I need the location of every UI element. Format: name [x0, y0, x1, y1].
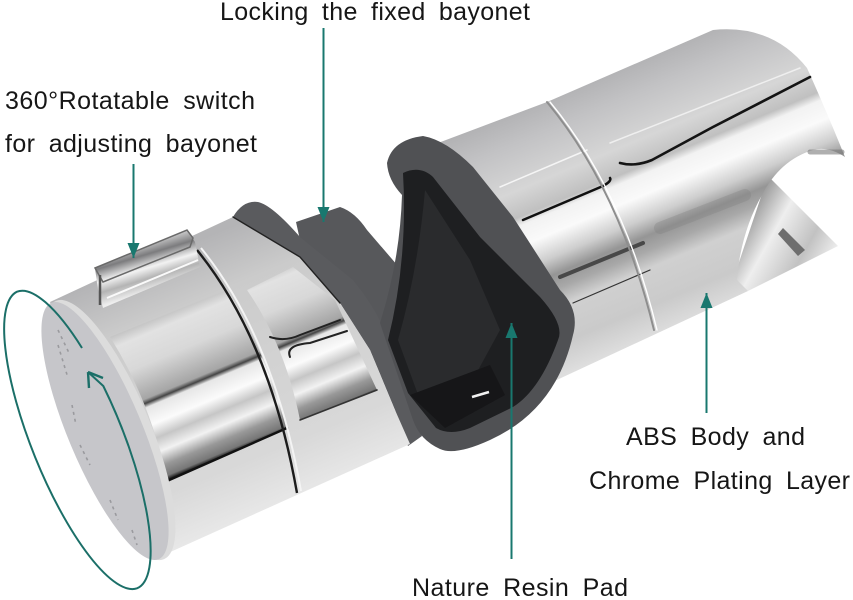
cap rim [19, 285, 201, 575]
label: body material [589, 423, 850, 495]
cap face [17, 288, 193, 574]
chrome reflection lines right [500, 68, 842, 330]
pad outer ring [380, 136, 575, 451]
rotatable switch tab [95, 230, 200, 308]
embossed face marks [58, 330, 137, 545]
interior step [410, 365, 505, 428]
chrome holder: left section and rotating cap [17, 217, 410, 575]
inner grey pad [296, 207, 410, 350]
second resin pad [380, 136, 575, 451]
label: rotatable switch: 360°Rotatable switch [5, 87, 255, 115]
chrome reflection lines left [167, 217, 377, 481]
arrow: switch [132, 164, 134, 258]
chrome holder: right section [420, 29, 845, 425]
label: body material: Chrome Plating Layer [589, 467, 850, 495]
upper right body [420, 29, 845, 425]
label: body material: ABS Body and [626, 423, 805, 451]
middle reflection panel [247, 267, 377, 420]
mounting plate [733, 176, 838, 291]
left body [50, 217, 410, 558]
interior lighter panel [398, 190, 500, 400]
seam between sections [197, 250, 297, 493]
first resin pad [233, 202, 422, 446]
arrow: body material [706, 293, 708, 413]
slot highlight [472, 392, 489, 397]
plate slot [778, 228, 805, 256]
cap reflection panel [110, 290, 287, 480]
circular rotation arrow [4, 291, 151, 589]
arrow: resin pad [510, 323, 512, 559]
arrow: locking bayonet [322, 28, 324, 222]
pad band [233, 202, 422, 446]
pad dark interior [388, 170, 560, 432]
label: rotatable switch: for adjusting bayonet [5, 130, 257, 158]
label: rotatable switch [5, 87, 257, 158]
